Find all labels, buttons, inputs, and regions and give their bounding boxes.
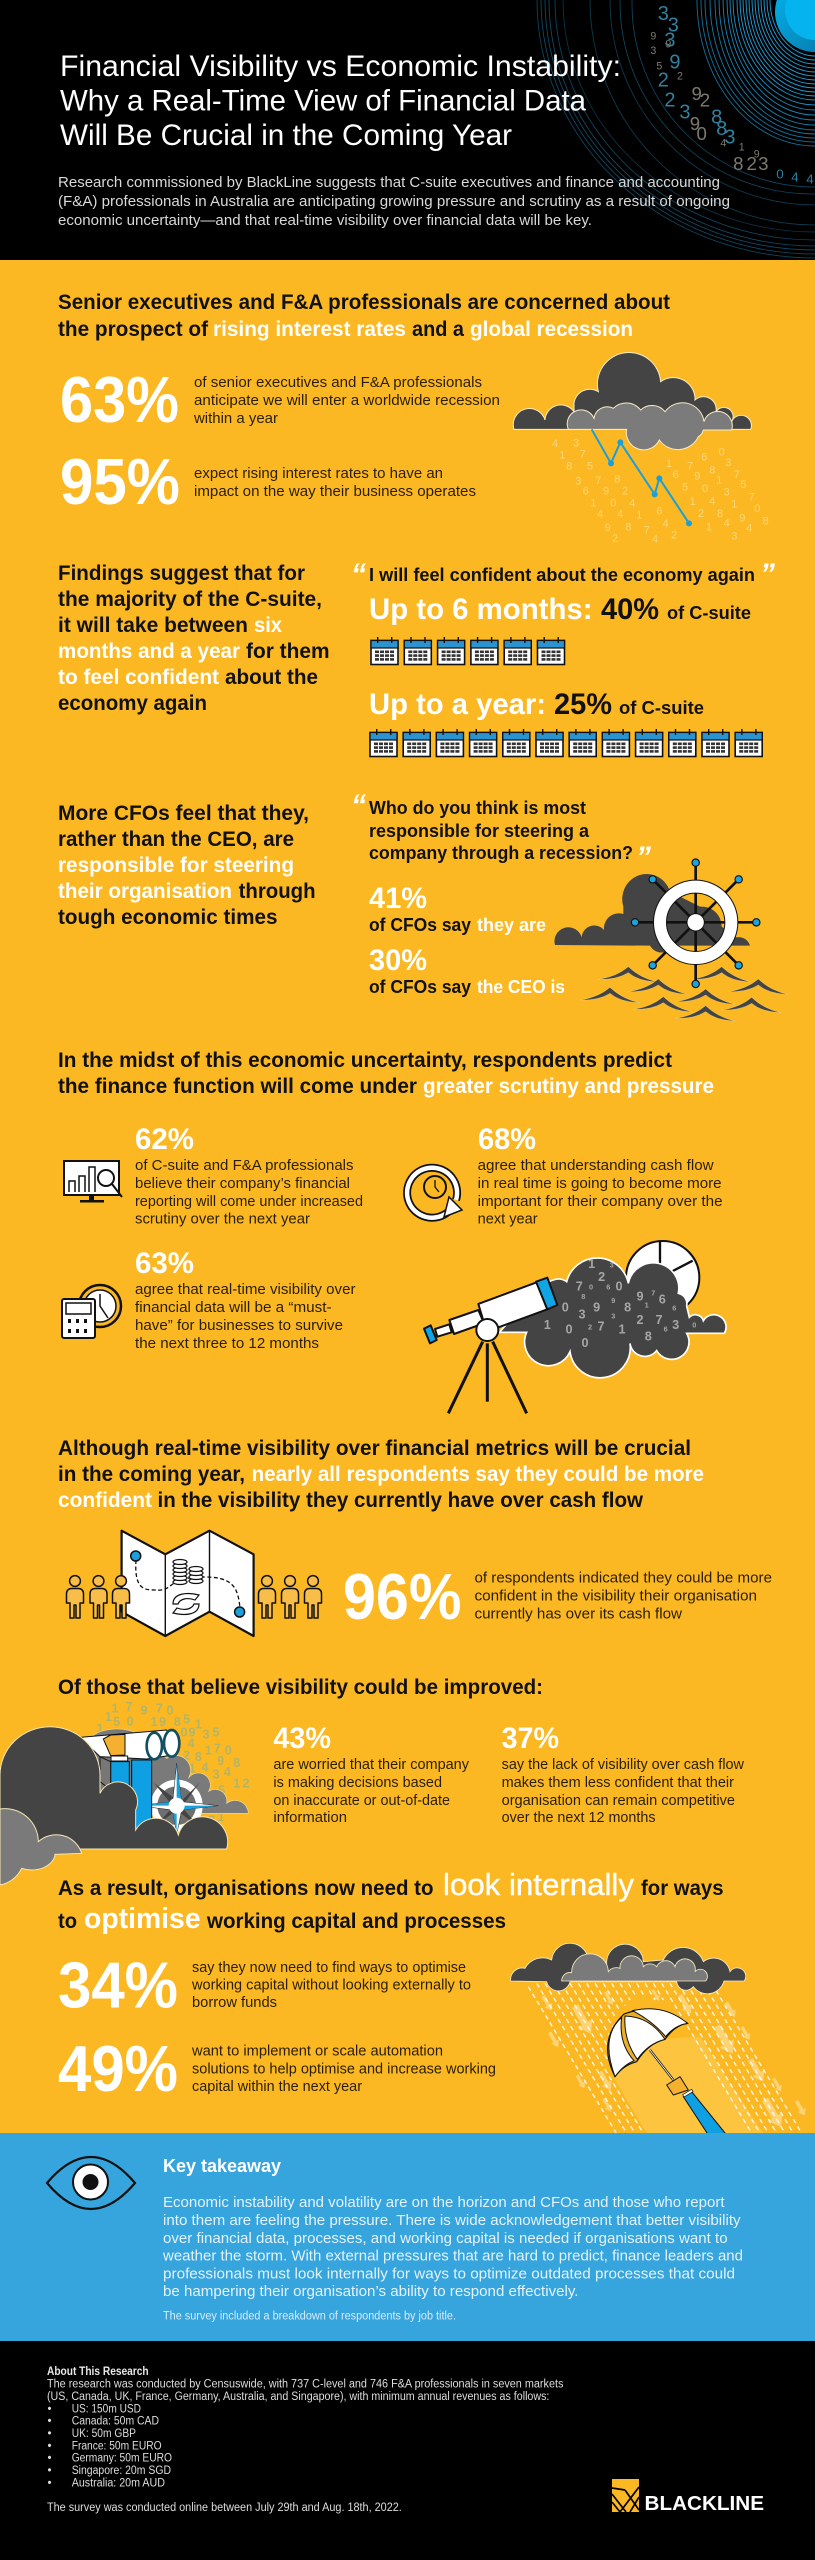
stat: up to 6 months — [369, 593, 751, 626]
stat: 63% recession: of senior executives and F&A professionals — [194, 374, 482, 391]
research text: France: 50m EURO — [72, 2440, 162, 2452]
text: CFO responsibility: their organisation — [58, 880, 232, 903]
research text: Australia: 20m AUD — [72, 2477, 165, 2489]
research text: • — [48, 2465, 52, 2477]
illustration: people and treasure map — [66, 1531, 322, 1636]
calendar row: 6 months — [371, 637, 564, 664]
heading: scrutiny and pressure: greater scrutiny and pressure — [423, 1075, 714, 1098]
stat: 49% automation: want to implement or scale automation — [191, 2043, 443, 2060]
stat: 43% decisions: 43% — [273, 1722, 331, 1755]
panel: about this research — [0, 2341, 815, 2560]
illustration: telescope, data cloud and pie chart: 306879163602 — [581, 1260, 696, 1333]
stat: 37% competitive: say the lack of visibility over cash flow — [502, 1756, 744, 1773]
swirl graphic of data lines and numbers: 044 — [776, 166, 814, 186]
heading: look internally: optimise — [84, 1903, 201, 1935]
icon: calculator and clock — [62, 1285, 121, 1338]
telescope — [424, 1278, 557, 1413]
text: C-suite confidence: the majority of the C-suite, — [58, 588, 322, 611]
title: Will Be Crucial in the Coming Year — [60, 119, 512, 152]
illustration: umbrella in the rain — [511, 1943, 809, 2144]
header panel — [0, 0, 815, 260]
stat: up to a year — [369, 688, 704, 721]
heading: look internally — [58, 1867, 724, 1935]
research text: UK: 50m GBP — [72, 2428, 136, 2440]
research text: • — [48, 2440, 52, 2452]
heading: rates and recession: the prospect of — [58, 318, 209, 341]
heading: rates and recession — [58, 291, 670, 341]
research text: • — [48, 2428, 52, 2440]
icon: eye — [47, 2157, 135, 2209]
research text: • — [48, 2403, 52, 2415]
stat: 34% working capital: borrow funds — [192, 1994, 277, 2011]
heading: look internally: for ways — [641, 1877, 724, 1900]
stat: 62% reporting scrutiny: 62% — [135, 1123, 194, 1156]
heading: look internally: working capital and processes — [206, 1910, 506, 1933]
stat: 62% reporting scrutiny: believe their company’s financial — [135, 1175, 350, 1192]
stat: 68% cash flow — [478, 1123, 723, 1228]
swirl graphic of data lines and numbers: 3339223883 — [658, 3, 736, 148]
key takeaway text: into them are feeling the pressure. There is wide acknowledgement that better visibility — [163, 2212, 741, 2229]
text: CFO responsibility: More CFOs feel that they, — [58, 802, 309, 825]
intro text — [58, 174, 730, 229]
stat: 30% of CFOs: of CFOs say — [369, 977, 471, 997]
stat: 41% of CFOs: of CFOs say — [369, 915, 471, 935]
illustration: storm cloud with falling numbers: 43178537869210444169874242167968031755037141028981443 — [552, 437, 769, 546]
text: C-suite confidence: Findings suggest that for — [58, 562, 305, 585]
stat: 34% working capital: 34% — [58, 1949, 178, 2022]
illustration: binoculars, compass and clouds: 17970150198510935417028981434125811 — [96, 1700, 250, 1827]
intro text: Research commissioned by BlackLine suggests that C-suite executives and finance and accounting — [58, 174, 720, 191]
stat: up to 6 months: 40% — [601, 593, 659, 626]
research text: • — [48, 2477, 52, 2489]
stat: 37% competitive: makes them less confident that their — [502, 1774, 734, 1791]
heading: those that believe: Of those that believe visibility could be improved: — [58, 1676, 543, 1699]
illustration: binoculars, compass and clouds — [0, 1700, 250, 1885]
stat: 62% reporting scrutiny: scrutiny over the next year — [135, 1210, 310, 1228]
stat: 49% automation: 49% — [58, 2032, 178, 2105]
text: C-suite confidence: months and a year — [58, 640, 240, 663]
heading: rates and recession: Senior executives and F&A professionals are concerned about — [58, 291, 670, 314]
stat: 63% real-time visibility: 63% — [135, 1247, 194, 1280]
key takeaway heading: Key takeaway — [163, 2155, 282, 2176]
key takeaway text: professionals must look internally for ways to optimize outdated processes that could — [163, 2266, 735, 2282]
intro text: economic uncertainty—and that real-time visibility over financial data will be key. — [58, 212, 592, 229]
stat: 96% could be more confident: confident in the visibility their organisation — [474, 1588, 757, 1605]
heading: scrutiny and pressure: the finance function will come under — [58, 1075, 417, 1098]
research text: • — [48, 2453, 52, 2465]
quote: who is responsible — [351, 789, 651, 874]
stat: 63% real-time visibility: the next three to 12 months — [135, 1335, 319, 1352]
stat: 62% reporting scrutiny: reporting will come under increased — [135, 1193, 363, 1210]
stat: 41% of CFOs — [369, 882, 546, 935]
stat: 96% could be more confident: currently has over its cash flow — [474, 1606, 682, 1623]
text: C-suite confidence: economy again — [58, 692, 207, 715]
quote: who is responsible: responsible for steering a — [369, 821, 590, 841]
stat: 34% working capital — [58, 1949, 471, 2022]
stat: 68% cash flow: next year — [478, 1210, 538, 1228]
stat: 37% competitive: 37% — [502, 1722, 559, 1755]
stat: 62% reporting scrutiny — [135, 1123, 363, 1228]
stat: up to 6 months: Up to 6 months: — [369, 593, 592, 626]
stat: 63% real-time visibility: have” for businesses to survive — [135, 1317, 343, 1334]
illustration: telescope, data cloud and pie chart — [424, 1241, 726, 1413]
text: CFO responsibility — [58, 802, 316, 929]
stat: 68% cash flow: in real time is going to become more — [478, 1175, 722, 1192]
quote: who is responsible: “ — [351, 789, 366, 822]
key takeaway text — [162, 2194, 743, 2300]
quote: I will feel confident: I will feel confident about the economy again — [369, 565, 755, 585]
stat: 43% decisions: on inaccurate or out-of-date — [273, 1792, 450, 1809]
text: C-suite confidence — [58, 562, 330, 715]
title — [60, 50, 621, 152]
stat: 43% decisions — [273, 1722, 469, 1826]
research text: About This Research — [47, 2366, 149, 2378]
stat: up to a year: Up to a year: — [369, 688, 546, 721]
key takeaway text: be hampering their organisation’s ability to respond effectively. — [163, 2283, 578, 2300]
stat: 96% could be more confident — [343, 1560, 772, 1633]
key takeaway text: Economic instability and volatility are on the horizon and CFOs and those who report — [163, 2194, 725, 2211]
quote: I will feel confident: ” — [760, 558, 775, 591]
text: CFO responsibility: through — [239, 880, 316, 903]
research text: • — [48, 2416, 52, 2428]
stat: 30% of CFOs — [369, 944, 565, 997]
text: C-suite confidence: about the — [225, 666, 318, 689]
stat: 68% cash flow: agree that understanding cash flow — [478, 1157, 714, 1174]
stat: up to a year: 25% — [554, 688, 612, 721]
key takeaway text: over financial data, processes, and working capital is needed if organisations want to — [163, 2230, 728, 2247]
stat: 37% competitive: over the next 12 months — [502, 1809, 656, 1826]
swirl graphic of data lines and numbers: 9092823 — [690, 83, 769, 174]
title: Financial Visibility vs Economic Instability: — [60, 50, 621, 83]
stat: 63% real-time visibility: agree that real-time visibility over — [135, 1281, 356, 1298]
icon: monitor with chart and magnifier — [64, 1161, 122, 1202]
logo: BlackLine: BLACKLINE — [644, 2493, 764, 2515]
heading: look internally: look internally — [443, 1867, 634, 1902]
swirl graphic of data lines and numbers — [537, 0, 815, 258]
text: C-suite confidence: it will take between — [58, 614, 248, 637]
swirl graphic of data lines and numbers: 93952419 — [650, 30, 760, 160]
stat: 63% real-time visibility: financial data will be a “must- — [135, 1299, 332, 1316]
stat: 95% interest rates: impact on the way their business operates — [194, 483, 476, 500]
heading: look internally: to — [58, 1910, 77, 1933]
heading: visibility over cash flow: confident — [58, 1489, 152, 1512]
stat: 68% cash flow: important for their company over the — [478, 1193, 723, 1210]
heading: rates and recession: rising interest rates — [213, 318, 406, 341]
text: C-suite confidence: to feel confident — [58, 666, 219, 689]
heading: visibility over cash flow: in the visibility they currently have over cash flow — [158, 1489, 644, 1512]
quote: who is responsible: ” — [636, 841, 651, 874]
stat: 96% could be more confident: 96% — [343, 1560, 462, 1633]
research text: US: 150m USD — [72, 2403, 141, 2415]
text: CFO responsibility: tough economic times — [58, 906, 278, 929]
quote: I will feel confident: “ — [351, 558, 366, 591]
stat: 34% working capital: say they now need to find ways to optimise — [192, 1959, 466, 1976]
stat: 43% decisions: information — [273, 1809, 347, 1826]
stat: 63% recession: 63% — [60, 363, 179, 436]
stat: up to 6 months: of C-suite — [667, 603, 751, 623]
stat: 43% decisions: are worried that their company — [273, 1756, 469, 1773]
panel: key takeaway — [0, 2133, 815, 2341]
stat: 68% cash flow: 68% — [478, 1123, 536, 1156]
binoculars and hands — [80, 1730, 179, 1828]
stat: up to a year: of C-suite — [619, 698, 704, 718]
stat: 95% interest rates — [60, 445, 476, 518]
research text: Canada: 50m CAD — [72, 2416, 159, 2428]
stat: 95% interest rates: expect rising interest rates to have an — [194, 465, 443, 482]
heading: visibility over cash flow: nearly all respondents say they could be more — [252, 1463, 704, 1486]
illustration: ship wheel, cloud and waves — [554, 859, 788, 1021]
icon: circular arrow with clock — [407, 1168, 462, 1218]
title: Why a Real-Time View of Financial Data — [60, 84, 586, 118]
heading: rates and recession: global recession — [470, 318, 633, 341]
research text: The survey was conducted online between July 29th and Aug. 18th, 2022. — [47, 2502, 402, 2514]
stat: 63% recession: within a year — [193, 410, 278, 427]
stat: 49% automation: capital within the next year — [192, 2078, 362, 2095]
heading: look internally: As a result, organisations now need to — [58, 1877, 434, 1900]
stat: 63% recession — [60, 363, 500, 436]
stat: 96% could be more confident: of respondents indicated they could be more — [474, 1570, 772, 1587]
stat: 41% of CFOs: they are — [477, 915, 546, 935]
research text — [47, 2366, 564, 2514]
text: CFO responsibility: rather than the CEO, are — [58, 828, 294, 851]
stat: 62% reporting scrutiny: of C-suite and F&A professionals — [135, 1157, 354, 1174]
logo: BlackLine — [612, 2479, 764, 2515]
key takeaway text: weather the storm. With external pressures that are hard to predict, finance leaders and — [162, 2248, 743, 2265]
illustration: telescope, data cloud and pie chart: 1270960398273107180 — [544, 1257, 679, 1350]
stat: 37% competitive — [502, 1722, 744, 1826]
stat: 30% of CFOs: 30% — [369, 944, 427, 977]
quote: I will feel confident — [351, 558, 775, 591]
stat: 41% of CFOs: 41% — [369, 882, 427, 915]
stat: 63% real-time visibility — [135, 1247, 356, 1352]
compass — [137, 1763, 218, 1835]
heading: rates and recession: and a — [412, 318, 464, 341]
stat: 95% interest rates: 95% — [60, 445, 180, 518]
heading: visibility over cash flow: Although real-time visibility over financial metrics will be crucial — [58, 1437, 691, 1460]
heading: visibility over cash flow: in the coming year, — [58, 1463, 245, 1486]
research text: Germany: 50m EURO — [72, 2453, 172, 2465]
research text: The research was conducted by Censuswide, with 737 C-level and 746 F&A professionals in seven markets — [47, 2379, 564, 2391]
text: C-suite confidence: six — [254, 614, 282, 637]
heading: scrutiny and pressure: In the midst of this economic uncertainty, respondents predict — [58, 1049, 672, 1072]
stat: 37% competitive: organisation can remain competitive — [502, 1792, 735, 1809]
research text: (US, Canada, UK, France, Germany, Australia, and Singapore), with minimum annual revenues as follows: — [47, 2391, 549, 2403]
stat: 63% recession: anticipate we will enter a worldwide recession — [194, 392, 500, 409]
intro text: (F&A) professionals in Australia are anticipating growing pressure and scrutiny as a result of ongoing — [58, 193, 730, 210]
quote: who is responsible: Who do you think is most — [369, 798, 586, 818]
research text: Singapore: 20m SGD — [72, 2465, 171, 2477]
survey note: The survey included a breakdown of respondents by job title. — [163, 2311, 456, 2323]
illustration: storm cloud with falling numbers — [513, 352, 769, 546]
stat: 34% working capital: working capital without looking externally to — [191, 1976, 471, 1994]
stat: 49% automation: solutions to help optimise and increase working — [192, 2060, 496, 2077]
text: CFO responsibility: responsible for steering — [58, 854, 294, 877]
text: C-suite confidence: for them — [246, 640, 330, 663]
calendar row: 12 months — [370, 729, 762, 756]
stat: 30% of CFOs: the CEO is — [477, 977, 565, 997]
heading: scrutiny and pressure — [58, 1049, 714, 1098]
stat: 43% decisions: is making decisions based — [273, 1774, 442, 1791]
heading: visibility over cash flow — [58, 1437, 704, 1512]
quote: who is responsible: company through a recession? — [369, 843, 633, 863]
stat: 49% automation — [58, 2032, 496, 2105]
